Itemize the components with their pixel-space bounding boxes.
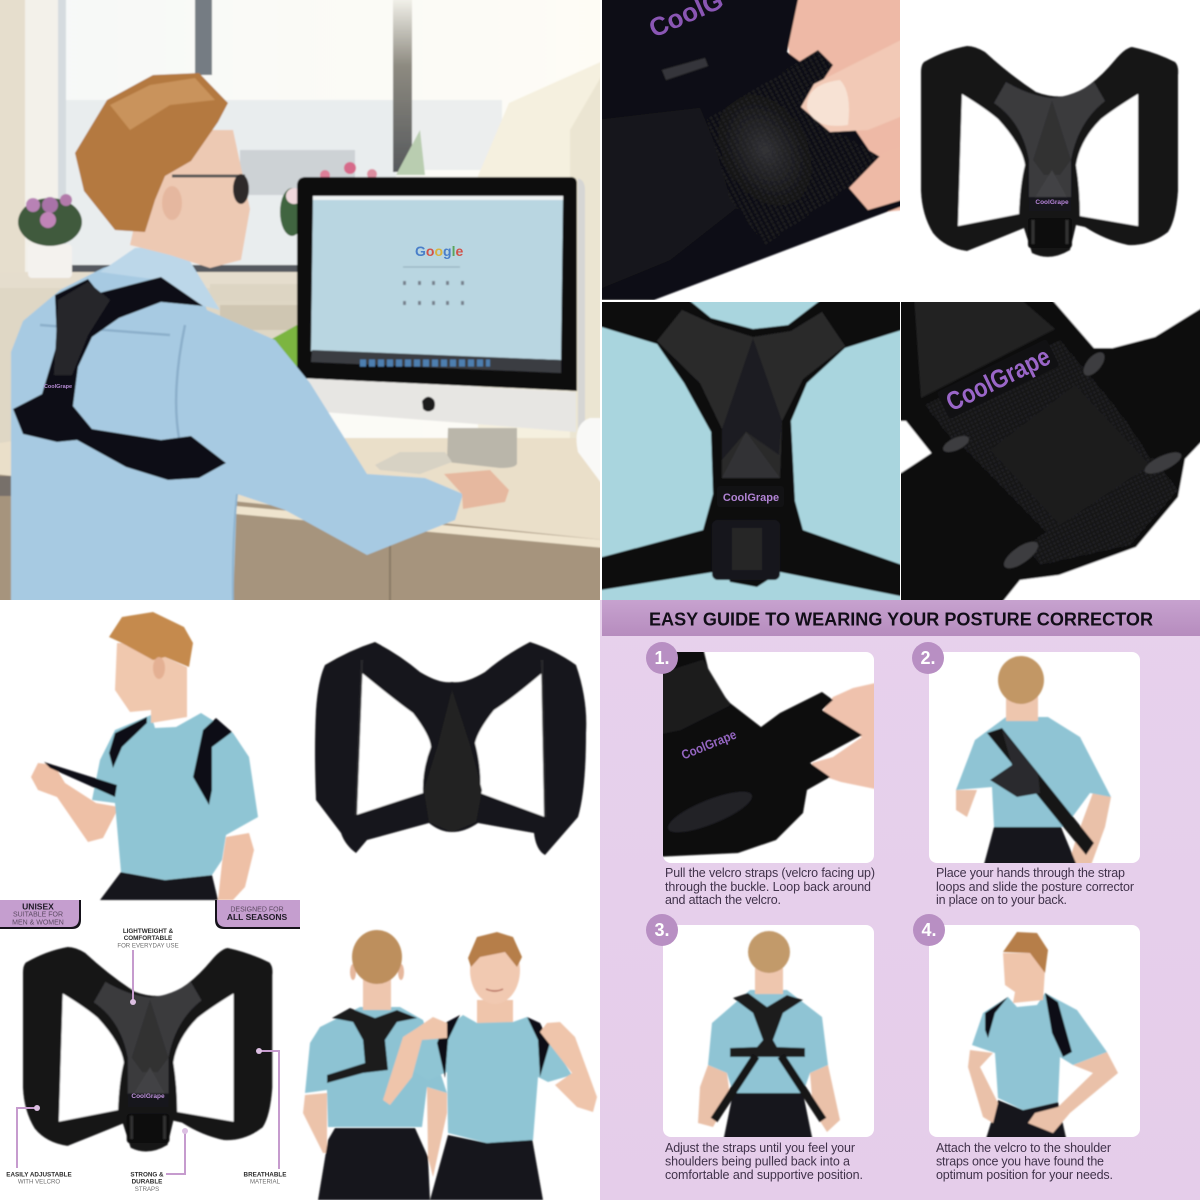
callout: breathable: MATERIAL	[250, 1178, 281, 1186]
step 3 caption: shoulders being pulled back into a	[665, 1154, 850, 1168]
callout: lightweight: COMFORTABLE	[124, 935, 172, 942]
step 1 caption: and attach the velcro.	[665, 893, 781, 907]
step 2 caption: loops and slide the posture corrector	[936, 880, 1134, 894]
buckle	[712, 520, 780, 580]
hair	[109, 612, 193, 667]
step 2 photo card	[929, 652, 1140, 868]
step 1 caption: through the buckle. Loop back around	[665, 880, 871, 894]
brand label: CoolGrape	[941, 341, 1055, 417]
pants	[100, 872, 218, 900]
step 3 caption	[665, 1141, 863, 1182]
panel: velcro tab close-up	[597, 0, 905, 300]
step 1 photo card: CoolGrape	[679, 727, 739, 762]
step 4 caption	[936, 1141, 1113, 1182]
room background	[0, 0, 605, 605]
man: shirt and body	[11, 243, 509, 605]
step 2 caption: in place on to your back.	[936, 893, 1067, 907]
callout: breathable: BREATHABLE	[244, 1172, 286, 1178]
brand label: CoolGrape	[131, 1093, 165, 1100]
step 4 caption: Attach the velcro to the shoulder	[936, 1141, 1111, 1155]
panel: easy guide	[600, 600, 1200, 1200]
black brace body	[597, 0, 905, 300]
strap highlight	[597, 108, 740, 290]
brace	[23, 947, 272, 1152]
badge: unisex: SUITABLE FOR	[13, 912, 63, 918]
callout: lightweight: LIGHTWEIGHT &	[123, 928, 174, 935]
callout: adjustable	[6, 1105, 72, 1186]
step 3 caption: comfortable and supportive position.	[665, 1168, 863, 1182]
panel: man at computer wearing brace	[0, 0, 605, 605]
panel: two men back and front	[303, 930, 597, 1200]
step 4 caption: optimum position for your needs.	[936, 1168, 1113, 1182]
header bar: EASY GUIDE TO WEARING YOUR POSTURE CORRECTOR	[649, 610, 1153, 630]
straps	[44, 717, 232, 805]
mug	[576, 418, 600, 482]
buckle clips	[941, 349, 1184, 573]
step 1 caption	[665, 866, 875, 907]
callout: strong: STRAPS	[135, 1186, 159, 1193]
step 1 badge	[646, 642, 678, 674]
shirt	[92, 713, 258, 880]
header bar	[602, 600, 1200, 636]
back man	[303, 930, 447, 1200]
brand label: CoolGrape	[1035, 199, 1069, 206]
screen logo: Google: Google	[415, 243, 463, 259]
step 3 badge	[646, 914, 678, 946]
panel: brace product shot	[921, 46, 1178, 257]
callout: strong: STRONG &	[130, 1172, 164, 1178]
brand label: CoolGrape	[44, 384, 72, 390]
panel: branded label close-up	[895, 295, 1200, 605]
callout: lightweight: FOR EVERYDAY USE	[117, 942, 179, 950]
step 3 badge: 3.	[654, 920, 670, 940]
step 1 photo card	[655, 648, 880, 863]
step 2 caption: Place your hands through the strap	[936, 866, 1125, 880]
ear	[153, 657, 165, 679]
callout: breathable	[244, 1048, 286, 1186]
step 1 badge: 1.	[654, 648, 670, 668]
velcro tab with mesh	[707, 50, 887, 245]
panel: annotated brace diagram	[6, 928, 286, 1193]
badge: unisex	[0, 900, 81, 929]
panel: man pulling strap	[31, 612, 258, 900]
step 4 caption: straps once you have found the	[936, 1154, 1104, 1168]
arms	[31, 763, 254, 900]
badge: all seasons	[215, 900, 300, 929]
step 3 caption: Adjust the straps until you feel your	[665, 1141, 855, 1155]
callout: adjustable: EASILY ADJUSTABLE	[6, 1172, 72, 1178]
front man	[383, 932, 597, 1200]
plastic buckle	[662, 58, 708, 80]
brace on man's back	[13, 277, 226, 480]
step 4 photo card	[929, 925, 1140, 1142]
black brace band	[595, 296, 905, 597]
man: head	[75, 73, 250, 268]
white background regions	[895, 295, 1200, 605]
step 1 caption: Pull the velcro straps (velcro facing up)	[665, 866, 875, 880]
step 4 badge	[913, 914, 945, 946]
mesh highlight	[717, 94, 812, 206]
step 4 badge: 4.	[921, 920, 937, 940]
badge: unisex: MEN & WOMEN	[12, 920, 64, 926]
callout: adjustable: WITH VELCRO	[18, 1178, 60, 1186]
icon: plant behind monitor	[270, 130, 425, 368]
icon: potted flower left	[18, 194, 82, 278]
brand label: CoolGrape	[723, 492, 779, 504]
callout: lightweight	[117, 928, 179, 1005]
head	[115, 643, 187, 723]
panel: brace on blue shirt close-up	[595, 295, 905, 605]
straps	[901, 448, 1046, 548]
step 2 badge: 2.	[920, 648, 936, 668]
leather section	[914, 296, 1055, 398]
monitor	[297, 177, 585, 468]
mesh pad	[925, 340, 1178, 565]
glasses on desk	[375, 452, 452, 474]
panel: black brace front	[315, 642, 586, 855]
leather panel	[657, 310, 845, 478]
callout: strong: DURABLE	[132, 1178, 162, 1186]
badge: unisex: UNISEX	[22, 902, 54, 912]
step 3 photo card	[663, 925, 874, 1142]
callout: strong	[130, 1128, 188, 1193]
thumb	[801, 38, 905, 210]
badge: all seasons: ALL SEASONS	[227, 912, 287, 922]
step 2 badge	[912, 642, 944, 674]
step 2 caption	[936, 866, 1134, 907]
badge: all seasons: DESIGNED FOR	[230, 906, 284, 914]
hand	[787, 0, 900, 213]
